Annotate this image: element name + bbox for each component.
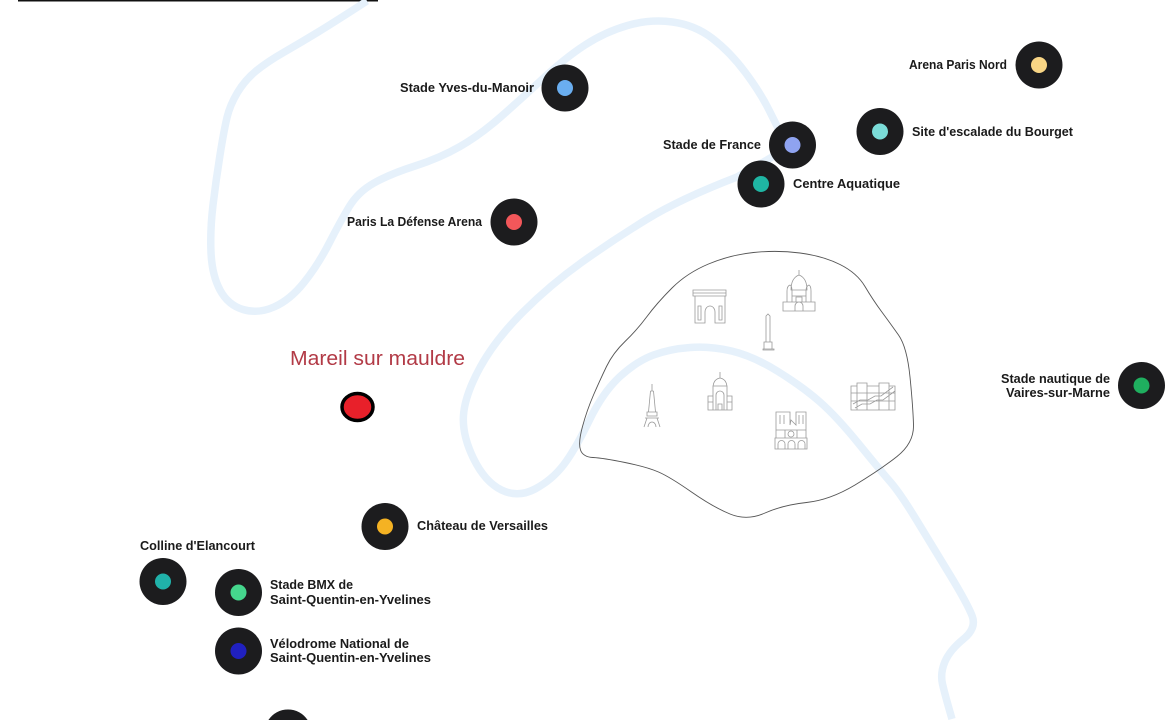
icon: Notre-Dame <box>775 412 807 449</box>
label: Colline d'Elancourt <box>140 539 256 553</box>
icon: Bercy building <box>851 383 895 410</box>
marker: Stade de France <box>663 122 816 168</box>
top edge black bar <box>18 0 378 2</box>
marker: cut-off bottom <box>268 709 308 720</box>
marker: Stade nautique de Vaires-sur-Marne <box>1001 362 1165 409</box>
label: Vélodrome National de <box>270 637 409 651</box>
marker: Stade BMX <box>215 569 431 616</box>
marker: Arena Paris Nord <box>909 42 1062 88</box>
marker: Vélodrome National <box>215 628 431 674</box>
label: Château de Versailles <box>417 519 548 533</box>
label: Stade BMX de <box>270 578 353 592</box>
icon: Sacré-Coeur <box>783 270 815 311</box>
marker: Site d'escalade du Bourget <box>856 108 1074 155</box>
marker: Colline d'Elancourt <box>140 539 256 605</box>
marker: Mareil sur mauldre <box>342 394 373 420</box>
label: Arena Paris Nord <box>909 58 1007 72</box>
marker: Vélodrome National: Saint-Quentin-en-Yvelines <box>270 651 431 665</box>
label: Stade Yves-du-Manoir <box>400 81 534 95</box>
label: Site d'escalade du Bourget <box>912 125 1074 139</box>
label: Stade nautique de <box>1001 372 1110 386</box>
label: Paris La Défense Arena <box>347 215 483 229</box>
label: Stade de France <box>663 138 761 152</box>
label: Mareil sur mauldre: Mareil sur mauldre <box>290 348 465 370</box>
icon: Invalides dome <box>708 372 732 410</box>
marker: Château de Versailles <box>362 503 548 550</box>
icon: Obelisk <box>763 314 774 350</box>
icon: Eiffel Tower <box>644 384 660 427</box>
marker: Paris La Défense Arena <box>347 198 538 246</box>
marker: Stade nautique de Vaires-sur-Marne: Vaires-sur-Marne <box>1006 386 1110 400</box>
marker: Centre Aquatique <box>738 160 900 208</box>
Paris outline <box>580 251 914 517</box>
marker: Stade Yves-du-Manoir <box>400 64 588 112</box>
icon: Arc de Triomphe <box>693 290 726 323</box>
marker: Stade BMX: Saint-Quentin-en-Yvelines <box>270 593 431 607</box>
label: Centre Aquatique <box>793 177 900 191</box>
river Seine <box>211 1 973 719</box>
